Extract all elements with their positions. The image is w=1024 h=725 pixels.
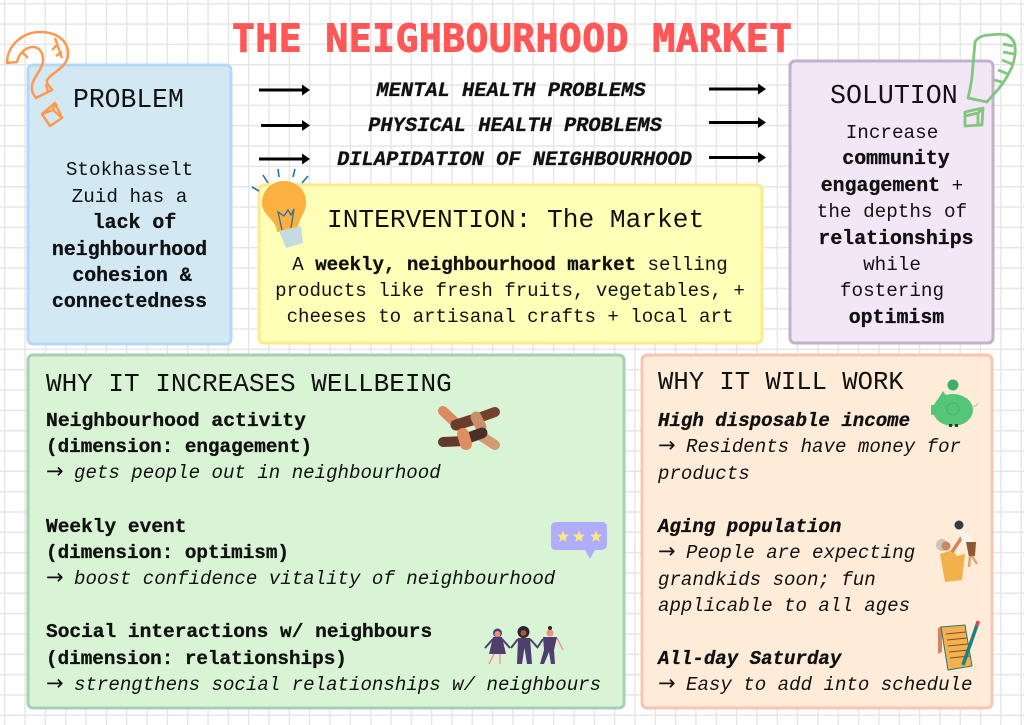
problem text: cohesion &: [72, 264, 192, 287]
item: high disposable income: Residents have money for: [686, 436, 961, 458]
intervention text: cheeses to artisanal crafts + local art: [287, 306, 733, 328]
effects list: DILAPIDATION OF NEIGHBOURHOOD: [337, 149, 692, 172]
item: all-day saturday: Easy to add into schedule: [686, 674, 972, 696]
problem text: lack of: [93, 211, 176, 234]
item: weekly event: →: [46, 565, 64, 589]
item: neighbourhood activity: Neighbourhood activity: [46, 410, 306, 432]
icon: exclamation mark: [965, 34, 1015, 126]
panel: solution: [790, 61, 993, 343]
icon: piggy bank: [931, 380, 978, 427]
item: aging population: grandkids soon; fun: [658, 569, 876, 591]
effects list: PHYSICAL HEALTH PROBLEMS: [368, 115, 663, 138]
item: aging population: People are expecting: [686, 542, 915, 564]
item: neighbourhood activity: (dimension: engagement): [46, 436, 312, 458]
solution text: engagement +: [821, 174, 963, 197]
item: all-day saturday: →: [658, 671, 676, 695]
icon: notepad and pencil: [938, 621, 978, 670]
icon: three people holding hands: [485, 626, 563, 664]
item: weekly event: Weekly event: [46, 516, 186, 538]
item: neighbourhood activity: [46, 410, 441, 484]
item: aging population: [657, 516, 915, 617]
item: all-day saturday: [657, 648, 972, 696]
item: high disposable income: High disposable income: [658, 410, 910, 432]
item: social interactions: (dimension: relationships): [46, 648, 347, 670]
item: social interactions: →: [46, 671, 64, 695]
intervention text: [275, 254, 745, 328]
problem text: neighbourhood: [52, 238, 207, 261]
solution text: community: [842, 147, 950, 170]
item: high disposable income: products: [657, 463, 750, 485]
solution text: Increase: [846, 122, 938, 144]
solution text: [817, 122, 974, 329]
arrows: left column: [259, 84, 310, 164]
icon: grandparent lifting child: [936, 520, 977, 582]
problem text: connectedness: [52, 290, 207, 313]
effects list: [337, 80, 692, 172]
icon: linked hands: [443, 411, 495, 445]
solution text: relationships: [818, 227, 974, 250]
item: high disposable income: →: [658, 433, 676, 457]
work heading: WHY IT WILL WORK: [658, 368, 904, 397]
problem text: [52, 159, 207, 313]
wellbeing heading: WHY IT INCREASES WELLBEING: [46, 369, 452, 399]
effects list: MENTAL HEALTH PROBLEMS: [375, 80, 646, 103]
icon: question mark: [7, 32, 68, 126]
item: social interactions: strengthens social relationships w/ neighbours: [74, 674, 601, 696]
problem heading: PROBLEM: [73, 85, 184, 115]
item: weekly event: [46, 516, 556, 590]
panel: intervention: [259, 185, 762, 343]
arrows: right column: [709, 84, 766, 163]
item: weekly event: (dimension: optimism): [46, 542, 289, 564]
title: THE NEIGHBOURHOOD MARKET: [232, 16, 792, 60]
item: aging population: →: [658, 539, 676, 563]
icon: light bulb: [252, 169, 308, 248]
solution text: fostering: [840, 280, 944, 302]
item: neighbourhood activity: gets people out in neighbourhood: [74, 462, 441, 484]
item: social interactions: Social interactions w/ neighbours: [46, 621, 432, 643]
item: aging population: Aging population: [657, 516, 841, 538]
solution text: while: [863, 254, 921, 276]
item: social interactions: [46, 621, 601, 696]
panel: problem: [28, 65, 231, 344]
item: all-day saturday: All-day Saturday: [657, 648, 843, 670]
item: aging population: applicable to all ages: [658, 595, 910, 617]
icon: rating speech bubble: [551, 522, 607, 559]
panel: why it increases wellbeing: [28, 355, 624, 708]
item: high disposable income: [657, 410, 961, 485]
solution text: the depths of: [817, 201, 967, 223]
problem text: Zuid has a: [72, 186, 187, 208]
item: weekly event: boost confidence vitality of neighbourhood: [74, 568, 556, 590]
intervention text: products like fresh fruits, vegetables, +: [275, 280, 745, 302]
problem text: Stokhasselt: [66, 159, 193, 181]
intervention text: A weekly, neighbourhood market selling: [292, 254, 728, 276]
panel: why it will work: [642, 355, 992, 708]
item: neighbourhood activity: →: [46, 459, 64, 483]
intervention heading: INTERVENTION: The Market: [327, 205, 704, 235]
solution heading: SOLUTION: [830, 81, 958, 111]
solution text: optimism: [849, 306, 944, 329]
